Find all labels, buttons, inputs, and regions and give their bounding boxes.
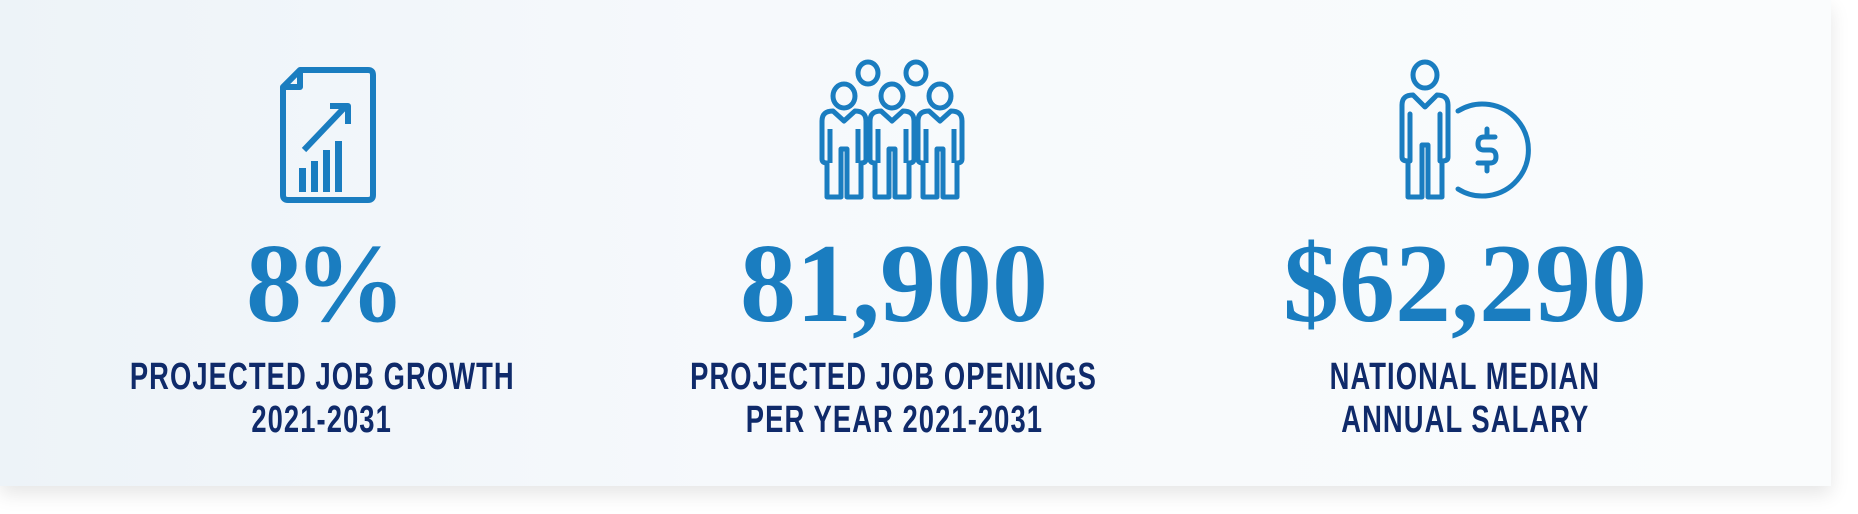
stat: 81,900: 81,900 xyxy=(740,222,1048,346)
label: projected job growth: PROJECTED JOB GROWTH xyxy=(130,356,514,398)
label: projected job openings xyxy=(691,356,1097,441)
label: national median salary: ANNUAL SALARY xyxy=(1341,399,1589,441)
stat: $62,290: $62,290 xyxy=(1283,222,1647,346)
label: projected job openings: PER YEAR 2021-2031 xyxy=(745,399,1043,441)
label: projected job openings: PROJECTED JOB OPENINGS xyxy=(691,356,1097,398)
label: projected job growth xyxy=(130,356,514,441)
stat: 8%: 8% xyxy=(246,222,398,346)
icon: person with coin xyxy=(1400,60,1531,200)
label: national median salary: NATIONAL MEDIAN xyxy=(1330,356,1600,398)
label: national median salary xyxy=(1330,356,1600,441)
icon: document with growth chart xyxy=(280,67,376,203)
label: projected job growth: 2021-2031 xyxy=(252,399,392,441)
icon: group of people xyxy=(820,60,964,200)
